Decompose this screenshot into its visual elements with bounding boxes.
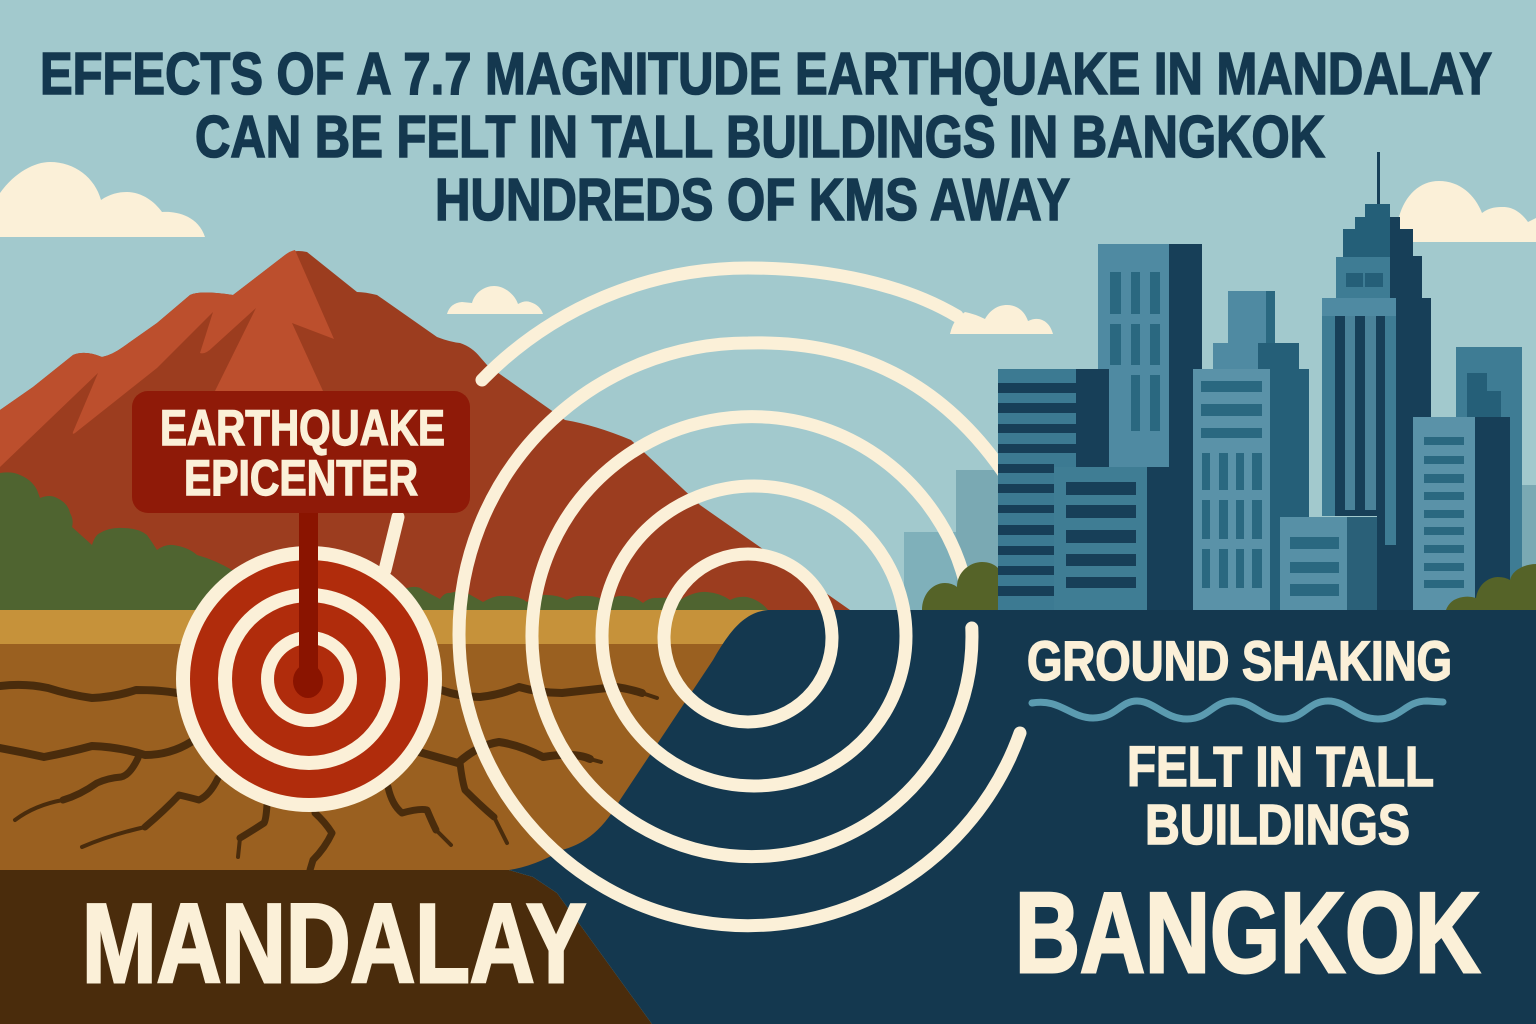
epicenter label: EARTHQUAKE — [160, 400, 445, 456]
mountain — [0, 250, 850, 610]
building: centre stepped — [1193, 291, 1309, 610]
label: ground shaking: GROUND SHAKING — [1027, 629, 1452, 692]
seismic wave rings — [385, 268, 1020, 926]
text: felt in tall buildings: FELT IN TALL — [1127, 735, 1434, 799]
building: low front left — [1054, 467, 1147, 610]
cloud: top right — [1399, 181, 1536, 242]
wave line — [1032, 701, 1443, 719]
text: felt in tall buildings — [1127, 735, 1434, 857]
ground: lower soil — [0, 644, 730, 870]
far buildings behind the waves — [904, 470, 1536, 610]
epicenter label — [132, 391, 470, 513]
title — [40, 41, 1492, 233]
cloud: small centre — [447, 286, 543, 314]
epicenter label: EPICENTER — [184, 450, 418, 506]
ground: bedrock — [0, 870, 652, 1024]
navy panel: Bangkok ground — [509, 610, 1536, 1024]
epicenter target — [176, 510, 442, 812]
ground: top soil — [0, 610, 770, 644]
trees: left and along horizon — [0, 472, 768, 610]
building: tall centre-left — [1098, 244, 1202, 610]
label: Mandalay: MANDALAY — [82, 881, 586, 1006]
cloud: top left — [0, 162, 205, 237]
city skyline — [998, 152, 1522, 610]
tall tower — [1322, 152, 1431, 610]
building: small front centre — [1280, 517, 1377, 610]
cloud: at the end of the outer wave — [950, 305, 1053, 334]
bush: right of city — [1446, 564, 1536, 610]
building: right front — [1413, 417, 1510, 610]
bush: left of city — [922, 562, 998, 610]
text: felt in tall buildings: BUILDINGS — [1145, 793, 1410, 857]
title: HUNDREDS OF KMS AWAY — [435, 167, 1070, 233]
cracks in ground — [0, 685, 657, 870]
title: CAN BE FELT IN TALL BUILDINGS IN BANGKOK — [195, 104, 1325, 170]
building: far right — [1456, 347, 1522, 610]
building: left striped — [998, 369, 1109, 610]
